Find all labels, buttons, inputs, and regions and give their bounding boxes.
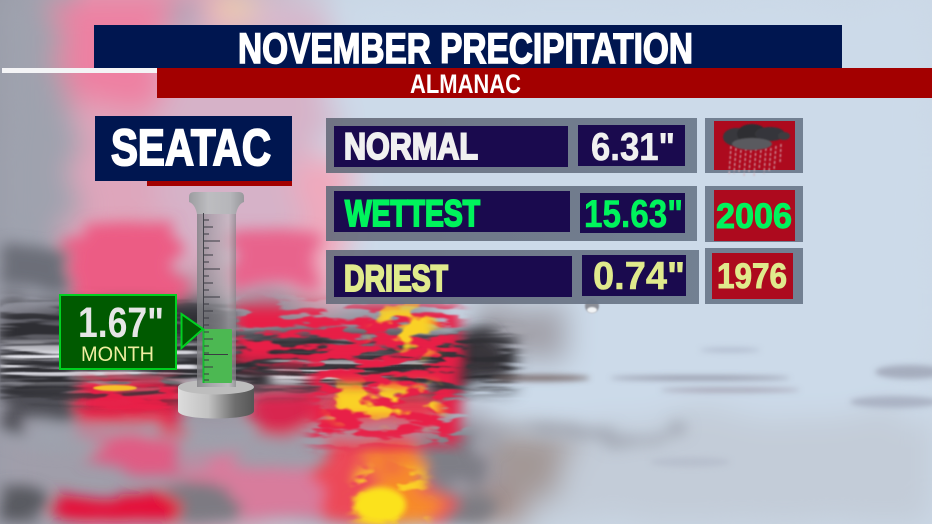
rain gauge (178, 192, 254, 418)
year panel: rain cloud (705, 118, 803, 176)
title bar (94, 25, 842, 73)
monthly caption: MONTH (81, 343, 154, 366)
subtitle bar (157, 68, 932, 99)
normal value: 6.31" (591, 126, 675, 169)
gauge water level (203, 329, 232, 383)
location text: SEATAC (111, 119, 271, 176)
water streaks (0, 305, 515, 524)
row: wettest (326, 186, 697, 241)
driest year: 1976 (717, 257, 787, 296)
gauge funnel (189, 192, 244, 214)
water drop (584, 304, 600, 314)
callout: monthly total (60, 295, 176, 369)
gauge scale (204, 213, 228, 383)
row: normal (326, 118, 697, 173)
wettest label: WETTEST (345, 193, 480, 234)
monthly value: 1.67" (78, 299, 164, 347)
year panel: 2006 (705, 186, 803, 242)
location label (95, 116, 292, 186)
arrow: pointer to water level (182, 314, 203, 348)
subtitle text: ALMANAC (410, 69, 521, 99)
row: driest (326, 250, 699, 304)
year panel: 1976 (705, 248, 803, 304)
wettest year: 2006 (716, 197, 792, 236)
gauge base (178, 380, 254, 418)
title text: NOVEMBER PRECIPITATION (238, 25, 693, 73)
driest value: 0.74" (593, 255, 685, 298)
driest label: DRIEST (344, 258, 448, 299)
icon: rain cloud (723, 124, 790, 176)
normal label: NORMAL (344, 126, 478, 167)
gauge tube (197, 212, 236, 387)
wettest value: 15.63" (584, 193, 683, 236)
accent line (2, 68, 158, 73)
